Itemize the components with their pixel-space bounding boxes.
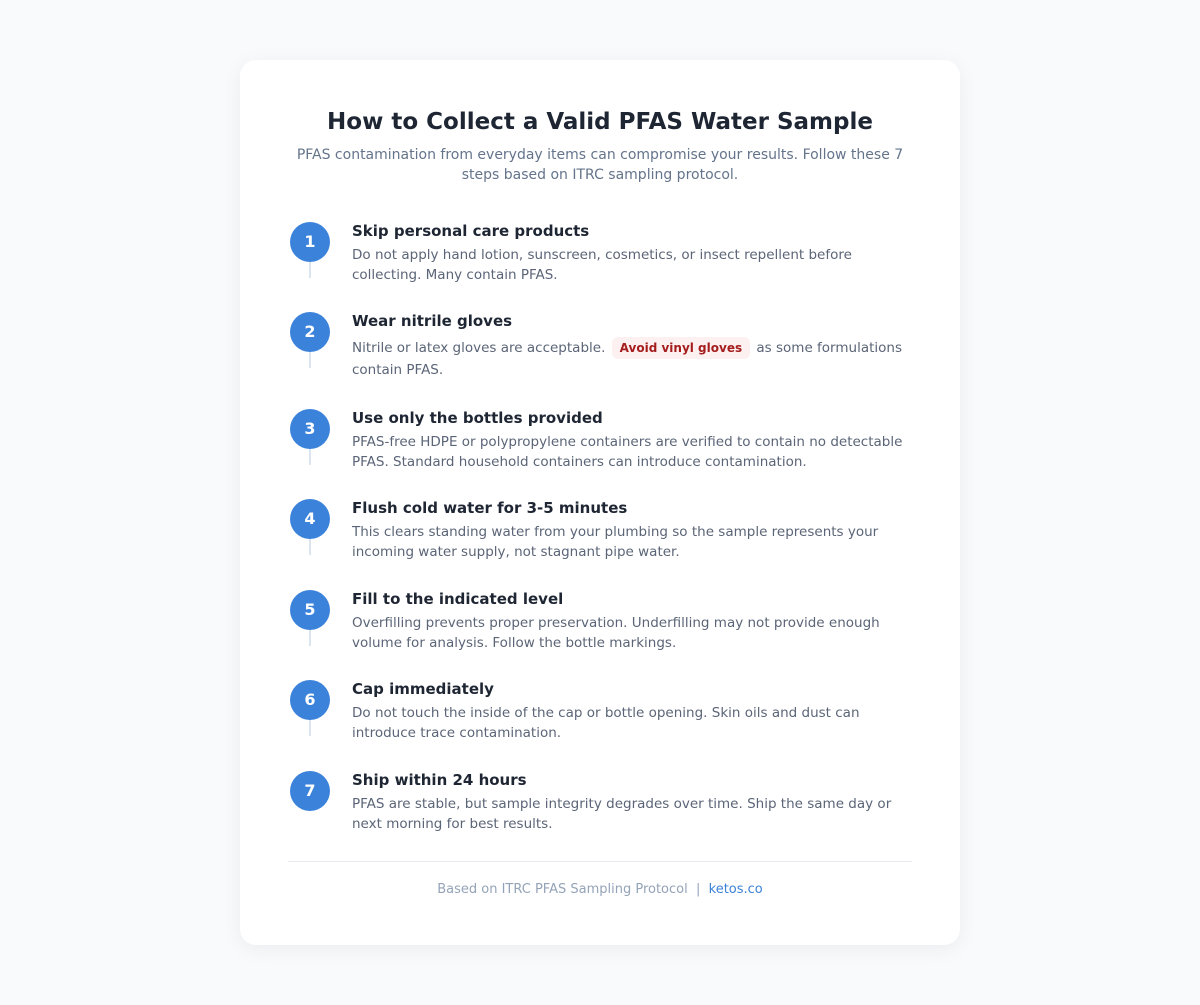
step 1: 1 bbox=[304, 232, 316, 251]
step 7: 7 bbox=[304, 781, 316, 800]
step 7 bbox=[290, 771, 892, 832]
step 2 bbox=[290, 312, 902, 378]
step 7: PFAS are stable, but sample integrity degrades over time. Ship the same day or next morning for best results. bbox=[352, 796, 891, 832]
step 5: Fill to the indicated level bbox=[352, 590, 563, 608]
step 4 bbox=[290, 499, 878, 560]
step 3: Use only the bottles provided bbox=[352, 409, 603, 427]
step 3 bbox=[290, 409, 902, 470]
step 3: PFAS-free HDPE or polypropylene containers are verified to contain no detectable PFAS. Standard household containers can introduce contamination. bbox=[352, 434, 902, 470]
step 2: Nitrile or latex gloves are acceptable. as some formulations contain PFAS. bbox=[352, 340, 902, 378]
step 1: Do not apply hand lotion, sunscreen, cosmetics, or insect repellent before collecting. Many contain PFAS. bbox=[352, 247, 852, 283]
step 6: Do not touch the inside of the cap or bottle opening. Skin oils and dust can introduce trace contamination. bbox=[352, 705, 860, 741]
step 1 bbox=[290, 222, 852, 283]
step 6: Cap immediately bbox=[352, 680, 494, 698]
step 1: Skip personal care products bbox=[352, 222, 589, 240]
step 2: 2 bbox=[304, 322, 316, 341]
step 4: This clears standing water from your plumbing so the sample represents your incoming water supply, not stagnant pipe water. bbox=[352, 524, 878, 560]
title: How to Collect a Valid PFAS Water Sample bbox=[327, 109, 873, 135]
step 2: Wear nitrile gloves bbox=[352, 312, 512, 330]
step 5: Overfilling prevents proper preservation. Underfilling may not provide enough volume for analysis. Follow the bottle markings. bbox=[352, 615, 880, 651]
step 4: 4 bbox=[304, 509, 316, 528]
step 5: 5 bbox=[304, 600, 316, 619]
step 2: Avoid vinyl gloves bbox=[620, 341, 742, 355]
step 6 bbox=[290, 680, 860, 741]
step 4: Flush cold water for 3-5 minutes bbox=[352, 499, 627, 517]
step 6: 6 bbox=[304, 690, 316, 709]
step 7: Ship within 24 hours bbox=[352, 771, 527, 789]
subtitle: PFAS contamination from everyday items can compromise your results. Follow these 7 steps based on ITRC sampling protocol. bbox=[297, 147, 903, 183]
footer: Based on ITRC PFAS Sampling Protocol | ketos.co bbox=[437, 882, 763, 897]
step 3: 3 bbox=[304, 419, 316, 438]
step 5 bbox=[290, 590, 880, 651]
card bbox=[240, 60, 960, 945]
